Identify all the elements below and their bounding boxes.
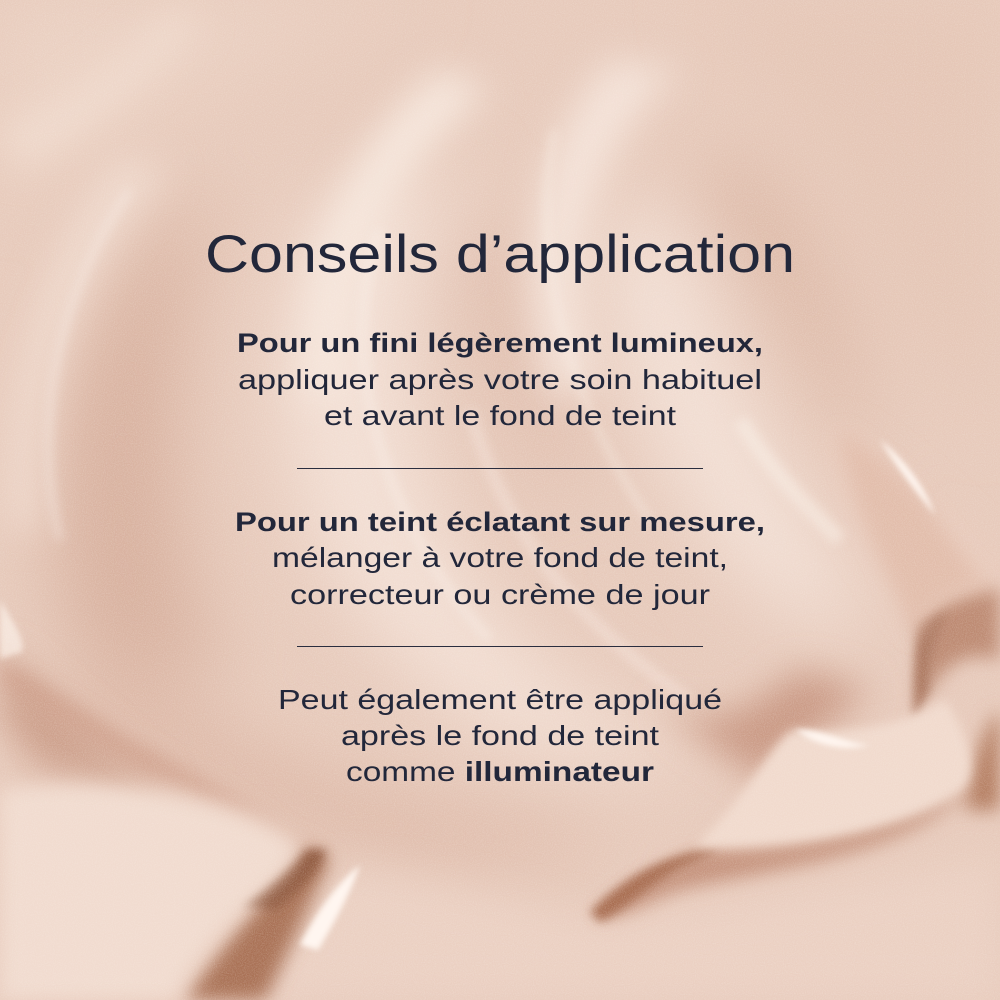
text block: lightly luminous finish <box>237 328 763 431</box>
text block: custom radiant complexion: mélanger à votre fond de teint, <box>272 542 728 573</box>
text block: custom radiant complexion: Pour un teint éclatant sur mesure, <box>235 507 765 537</box>
dark crevices <box>0 590 1000 1000</box>
text block: illuminator use: comme illuminateur <box>346 756 654 787</box>
text block: custom radiant complexion: correcteur ou crème de jour <box>290 579 710 610</box>
text block: custom radiant complexion <box>235 507 765 610</box>
divider <box>297 468 703 469</box>
soft cream folds <box>0 430 985 1000</box>
text block: lightly luminous finish: et avant le fond de teint <box>324 400 676 431</box>
title: Conseils d’application <box>205 225 795 284</box>
highlighted cream fold, lower right <box>695 700 970 846</box>
text block: lightly luminous finish: appliquer après votre soin habituel <box>238 364 762 395</box>
text block: illuminator use: après le fond de teint <box>341 720 659 751</box>
text block: lightly luminous finish: Pour un fini légèrement lumineux, <box>237 328 763 358</box>
divider <box>297 646 703 647</box>
text block: illuminator use: Peut également être appliqué <box>278 684 722 715</box>
glossy highlights <box>0 440 935 950</box>
text block: illuminator use <box>278 684 722 787</box>
